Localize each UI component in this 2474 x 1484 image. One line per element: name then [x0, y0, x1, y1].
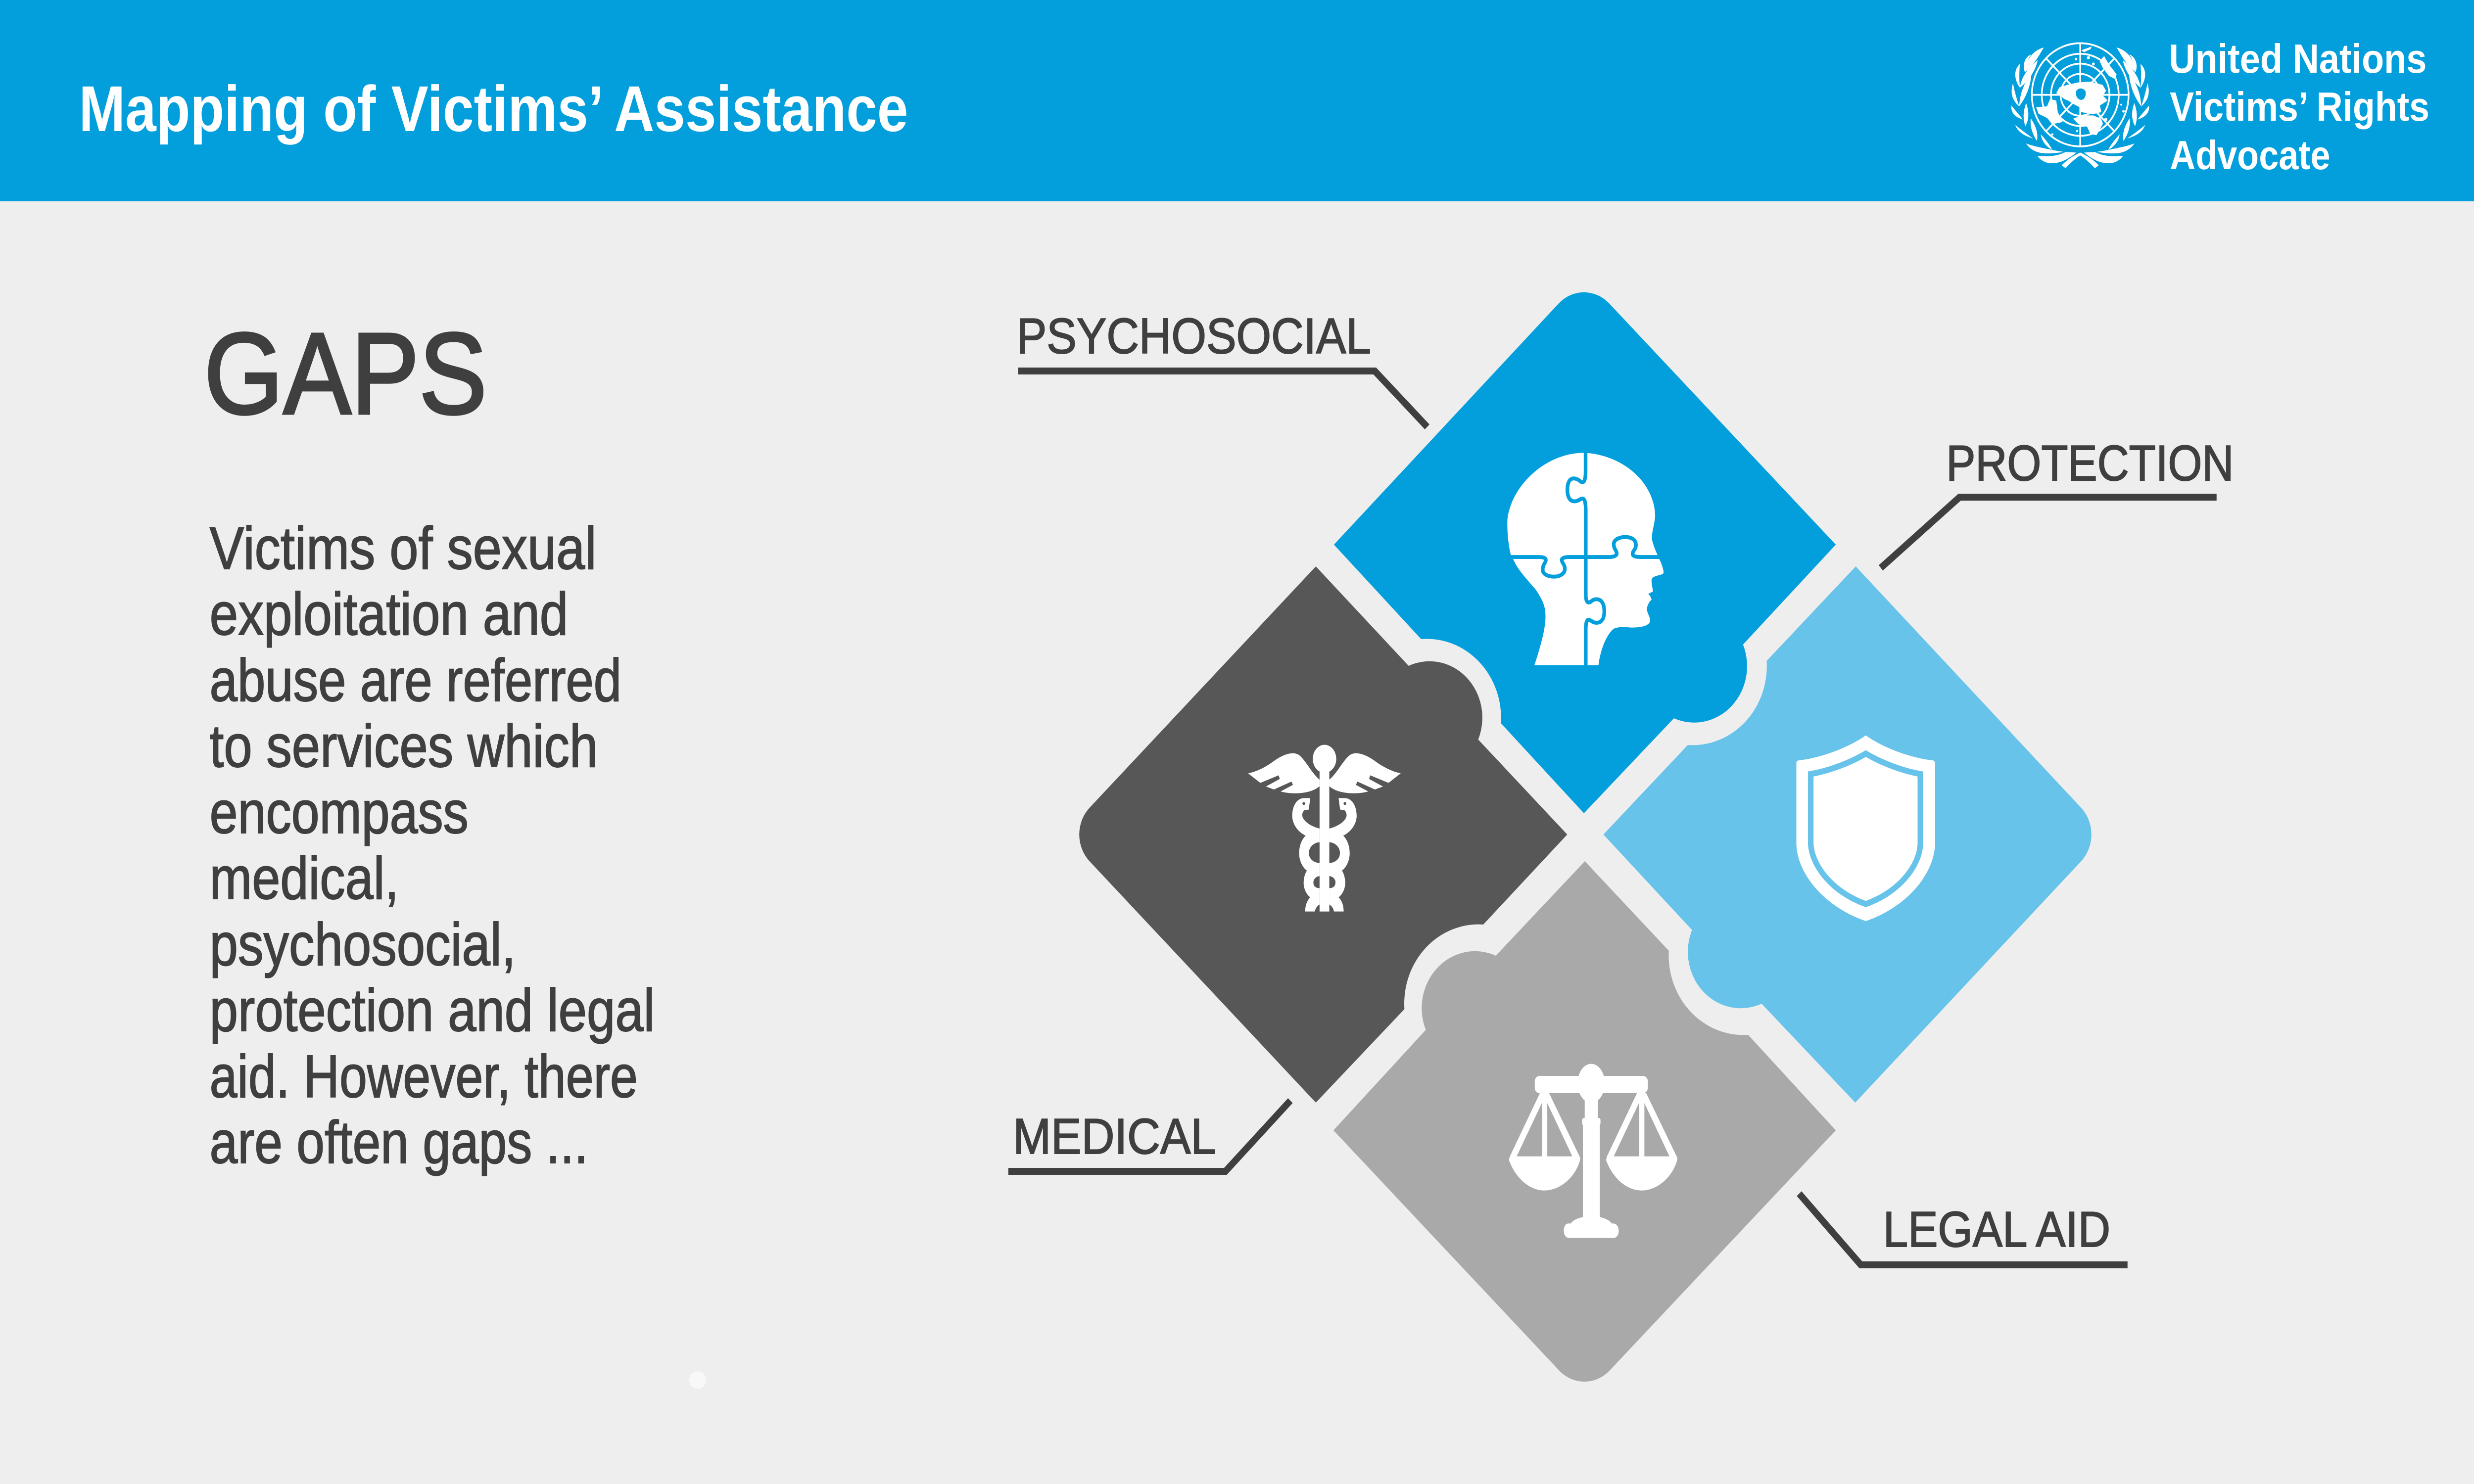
panel: legal aid puzzle piece — [1333, 861, 1836, 1382]
body text: protection and legal — [210, 977, 655, 1044]
icon: head with puzzle pieces — [1507, 452, 1664, 666]
panel: protection puzzle piece — [1604, 566, 2092, 1103]
callout: medical label: MEDICAL — [1013, 1108, 1216, 1164]
organisation name: United Nations — [2169, 36, 2426, 82]
body text: exploitation and — [210, 581, 568, 648]
header banner — [0, 0, 2474, 201]
organisation name: Victims’ Rights — [2170, 84, 2429, 130]
callout: legal aid label — [1799, 1194, 2128, 1265]
title: Mapping of Victims’ Assistance — [79, 72, 908, 145]
body text: aid. However, there — [210, 1043, 638, 1111]
organisation name: Advocate — [2170, 133, 2330, 179]
body text: encompass — [210, 779, 469, 846]
callout: protection label: PROTECTION — [1946, 435, 2234, 491]
callout: protection label — [1881, 435, 2234, 568]
body text: to services which — [210, 713, 598, 780]
decorative dot marker — [689, 1371, 706, 1389]
icon: UN emblem — [2011, 43, 2149, 168]
callout: psychosocial label: PSYCHOSOCIAL — [1017, 308, 1371, 364]
callout: legal aid label: LEGAL AID — [1883, 1201, 2110, 1257]
icon: scales of justice — [1509, 1064, 1677, 1238]
organisation name — [2169, 36, 2429, 179]
body text: Victims of sexual — [210, 515, 596, 582]
panel: medical puzzle piece — [1079, 566, 1567, 1103]
body text: medical, — [210, 845, 399, 912]
body text — [210, 515, 655, 1176]
icon: shield — [1796, 736, 1935, 921]
body text: abuse are referred — [210, 647, 621, 714]
body text: are often gaps ... — [210, 1109, 588, 1176]
callout: medical label — [1008, 1101, 1290, 1171]
icon: caduceus — [1248, 745, 1401, 912]
body text: psychosocial, — [210, 911, 516, 978]
panel: psychosocial puzzle piece — [1334, 292, 1836, 813]
callout: psychosocial label — [1017, 308, 1427, 427]
heading: GAPS: GAPS — [204, 310, 487, 439]
